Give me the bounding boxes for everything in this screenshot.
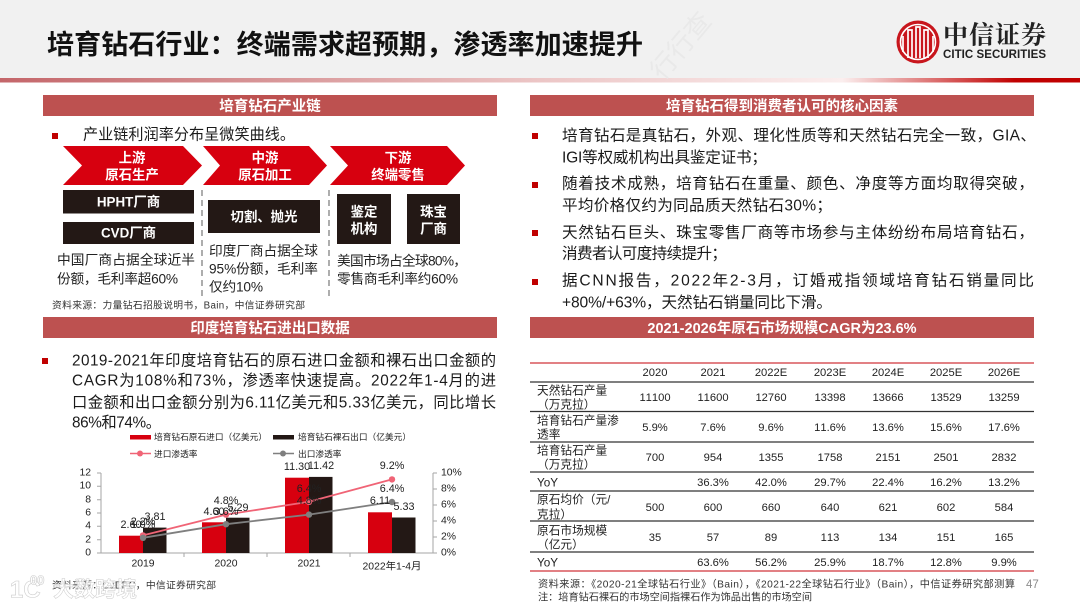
row: penetration: 5.9%: [642, 422, 668, 434]
chart axes: 2020: [214, 558, 238, 570]
source: chain: 资料来源：力量钻石招股说明书，Bain，中信证券研究部: [52, 298, 305, 312]
arrow: midstream: [203, 146, 327, 185]
row: average price: 584: [995, 502, 1013, 514]
watermark: bottom left: [10, 572, 137, 604]
watermark: bottom left: 大数跨境: [53, 578, 137, 602]
text: India share: 印度厂商占据全球: [209, 242, 318, 258]
row: penetration: 培育钻石产量渗: [537, 414, 619, 428]
heading: core factors: 培育钻石得到消费者认可的核心因素: [666, 97, 898, 115]
row: penetration: 7.6%: [700, 422, 726, 434]
table header: 2023E: [814, 367, 846, 379]
arrow: downstream: 下游: [385, 150, 412, 166]
text: US share: 零售商毛利率约60%: [337, 270, 458, 286]
row: market YoY: YoY: [537, 556, 558, 570]
box: jewellery: 珠宝: [420, 204, 447, 220]
chart axes: 12: [79, 468, 91, 478]
bullet: India CAGR: 口金额和出口金额分别为6.11亿美元和5.33亿美元，同比增长: [72, 394, 496, 412]
header band: [0, 0, 1080, 82]
chart axes: 0: [85, 548, 91, 558]
source: India chart: 资料来源：CJEPC，中信证券研究部: [52, 578, 216, 592]
bullet: real diamonds: 培育钻石是真钻石，外观、理化性质等和天然钻石完全一致，GIA、: [562, 126, 1036, 144]
chart axes: 2021: [297, 558, 321, 570]
row: market size: 35: [649, 532, 661, 544]
chart legend: 培育钻石裸石出口（亿美元）: [298, 431, 411, 442]
bullet: CNN report: +80%/+63%，天然钻石销量同比下滑。: [562, 294, 832, 312]
panel: industry chain: [43, 95, 497, 312]
chart legend: 进口渗透率: [154, 448, 198, 459]
panel: consumer recognition: [530, 95, 1036, 312]
chart axes: 4: [85, 520, 91, 532]
data labels: 4.60: [203, 506, 225, 518]
data labels: 11.42: [308, 460, 334, 472]
row: average price: 660: [762, 502, 780, 514]
row: lab-grown output: 954: [704, 452, 722, 464]
data labels: 9.2%: [380, 460, 405, 472]
row: market YoY: 63.6%: [697, 557, 729, 569]
table header: 2026E: [988, 367, 1020, 379]
row: market size: 89: [765, 532, 777, 544]
chart axes: 8%: [441, 484, 456, 494]
arrow: upstream: 上游: [119, 150, 146, 166]
bullet: CNN report: [532, 272, 1034, 312]
bullet: market participants: [532, 224, 1034, 262]
row: natural output: 13398: [814, 392, 846, 404]
table header: 2025E: [930, 367, 962, 379]
table header: 2021: [701, 367, 725, 379]
row: market size: 151: [937, 532, 955, 544]
chart axes: 6: [85, 508, 91, 518]
arrow: midstream: 原石加工: [238, 168, 292, 182]
arrow: upstream: 原石生产: [105, 166, 159, 182]
data labels: 4.8%: [297, 495, 322, 507]
chart axes: 6%: [441, 500, 456, 510]
row: market size: 57: [707, 532, 719, 544]
box: jewellery: [407, 194, 460, 244]
row: market YoY: 9.9%: [991, 557, 1017, 569]
arrow: downstream: 终端零售: [371, 166, 425, 182]
bullet: real diamonds: [532, 126, 1036, 166]
logo: CITIC Securities: 中信证券: [943, 22, 1046, 50]
logo: CITIC Securities: CITIC SECURITIES: [943, 49, 1046, 61]
bullet: India CAGR: 2019-2021年印度培育钻石的原石进口金额和裸石出口金额的: [72, 352, 496, 370]
source: market table: [538, 578, 1015, 604]
row: market YoY: [537, 556, 1017, 570]
row: average price: 克拉）: [537, 508, 572, 522]
text: India share: [209, 242, 318, 294]
chart legend: 培育钻石原石进口（亿美元）: [154, 431, 267, 442]
bullet: India CAGR: 86%和74%。: [72, 414, 161, 432]
row: average price: 500: [646, 502, 664, 514]
data labels: 6.11: [370, 495, 390, 507]
box: CVD: [63, 222, 194, 244]
box: HPHT: HPHT厂商: [97, 194, 160, 210]
row: output YoY: 42.0%: [755, 477, 787, 489]
box: certification: 鉴定: [351, 204, 377, 220]
chart axes: 2019: [131, 558, 155, 570]
watermark: bottom left: 1C: [10, 576, 41, 604]
table header: 2022E: [755, 367, 787, 379]
text: China share: 份额，毛利率超60%: [57, 270, 178, 286]
panel: India import and export: [42, 317, 497, 592]
bullet: technology maturity: [532, 174, 1034, 214]
chart axes: 10%: [441, 468, 462, 478]
chart legend: [130, 431, 411, 459]
chart axes: 4%: [441, 516, 456, 526]
heading: industry chain: 培育钻石产业链: [219, 97, 321, 115]
row: natural output: 12760: [755, 392, 787, 404]
row: average price: 640: [821, 502, 839, 514]
table: market size: [530, 363, 1034, 571]
panel: rough diamond market: [530, 317, 1034, 604]
arrow: downstream: [330, 146, 465, 185]
text: US share: 美国市场占全球80%，: [337, 252, 467, 268]
table header: 2024E: [872, 367, 904, 379]
source: market table: 注：培育钻石裸石的市场空间指裸石作为饰品出售的市场空间: [538, 590, 812, 604]
row: natural output: （万克拉）: [537, 398, 595, 412]
row: penetration: 15.6%: [930, 422, 962, 434]
row: penetration: [537, 414, 1020, 442]
row: natural output: 天然钻石产量: [537, 384, 607, 398]
table header: [643, 367, 1020, 379]
row: market YoY: 56.2%: [755, 557, 787, 569]
bullet: technology maturity: 随着技术成熟，培育钻石在重量、颜色、净度等方面均取得突破，: [562, 174, 1034, 192]
heading: market CAGR: [530, 317, 1034, 338]
row: average price: 600: [704, 502, 722, 514]
row: output YoY: YoY: [537, 476, 558, 490]
bullet: technology maturity: 平均价格仅约为同品质天然钻石30%；: [562, 196, 832, 214]
row: market size: 原石市场规模: [537, 524, 607, 538]
row: lab-grown output: 700: [646, 452, 664, 464]
chart axes: [79, 468, 462, 572]
line: export penetration: [140, 499, 395, 541]
row: average price: 原石均价（元/: [537, 492, 611, 506]
row: market YoY: 12.8%: [930, 557, 962, 569]
text: India share: 95%份额，毛利率: [209, 260, 318, 276]
row: average price: [537, 492, 1013, 522]
box: HPHT: [63, 190, 194, 214]
row: market size: 113: [821, 532, 839, 544]
row: market YoY: 25.9%: [814, 557, 846, 569]
bullet: CNN report: 据CNN报告，2022年2-3月，订婚戒指领域培育钻石销量同比: [562, 272, 1034, 290]
row: market YoY: 18.7%: [872, 557, 904, 569]
data labels: 6.4%: [380, 483, 405, 495]
data labels: 2.60: [120, 519, 142, 531]
title: 培育钻石行业：终端需求超预期，渗透率加速提升: [47, 30, 643, 60]
row: market size: [537, 524, 1013, 552]
source: market table: 资料来源：《2020-21全球钻石行业》（Bain），《2021-22全球钻石行业》（Bain），中信证券研究部测算: [538, 578, 1015, 590]
data labels: [120, 460, 415, 531]
text: China share: [57, 252, 195, 286]
table header: 2020: [643, 367, 667, 379]
box: certification: [337, 194, 391, 244]
data labels: 1.9%: [131, 519, 156, 531]
data labels: 4.8%: [214, 495, 239, 507]
bullet: real diamonds: IGI等权威机构出具鉴定证书；: [562, 148, 767, 166]
bullet: market participants: 消费者认可度持续提升；: [562, 244, 727, 262]
chart axes: 10: [79, 480, 91, 492]
bullet: market participants: 天然钻石巨头、珠宝零售厂商等市场参与主体纷纷布局培育钻石，: [562, 224, 1034, 242]
box: certification: 机构: [351, 220, 377, 236]
row: penetration: 17.6%: [988, 422, 1020, 434]
chart axes: 8: [85, 494, 91, 506]
row: market size: 134: [879, 532, 897, 544]
box: cutting and polishing: [208, 200, 320, 233]
chart axes: 2022年1-4月: [363, 560, 421, 572]
row: lab-grown output: 1758: [818, 452, 842, 464]
chart axes: 2%: [441, 532, 456, 542]
data labels: 2.2%: [131, 516, 156, 528]
row: natural output: 13666: [872, 392, 904, 404]
row: penetration: 11.6%: [814, 422, 846, 434]
row: natural output: 13259: [988, 392, 1020, 404]
arrow: midstream: 中游: [252, 150, 279, 166]
watermark: bottom left: 00: [30, 572, 44, 588]
bars: import: [119, 478, 392, 553]
data labels: 5.29: [227, 502, 249, 514]
text: China share: 中国厂商占据全球近半: [57, 252, 195, 268]
row: output YoY: 22.4%: [872, 477, 904, 489]
box: CVD: CVD厂商: [101, 224, 156, 240]
row: penetration: 13.6%: [872, 422, 904, 434]
heading: India data: [43, 317, 497, 338]
row: lab-grown output: 1355: [759, 452, 783, 464]
text: India share: 仅约10%: [209, 280, 263, 294]
chart axes: 0%: [441, 548, 456, 558]
line: import penetration: [140, 476, 395, 539]
row: output YoY: 16.2%: [930, 477, 962, 489]
box: jewellery: 厂商: [420, 220, 447, 236]
box: cutting and polishing: 切割、抛光: [231, 208, 297, 224]
row: lab-grown output: 2832: [992, 452, 1016, 464]
row: lab-grown output: [537, 444, 1016, 472]
watermark: header: 行行查: [644, 6, 717, 85]
bullet: smile curve: 产业链利润率分布呈微笑曲线。: [83, 126, 295, 144]
row: output YoY: 13.2%: [988, 477, 1020, 489]
row: natural output: 11100: [639, 392, 671, 404]
row: lab-grown output: （万克拉）: [537, 458, 595, 472]
row: average price: 621: [879, 502, 897, 514]
heading: market CAGR: 2021-2026年原石市场规模CAGR为23.6%: [647, 319, 917, 337]
logo: CITIC Securities: [896, 20, 1046, 64]
bars: export: [143, 477, 416, 553]
row: market size: 165: [995, 532, 1013, 544]
data labels: 3.81: [144, 511, 166, 523]
chart: import and export: [79, 431, 462, 572]
row: penetration: 透率: [537, 428, 561, 442]
row: market size: （亿元）: [537, 538, 584, 552]
chart legend: 出口渗透率: [298, 448, 342, 459]
row: average price: 602: [937, 502, 955, 514]
row: lab-grown output: 2501: [934, 452, 958, 464]
heading: industry chain: [43, 95, 497, 116]
row: natural output: 11600: [697, 392, 729, 404]
row: natural output: [537, 384, 1020, 412]
heading: India data: 印度培育钻石进出口数据: [190, 319, 350, 337]
row: output YoY: 36.3%: [697, 477, 729, 489]
data labels: 6.4%: [297, 483, 322, 495]
row: output YoY: 29.7%: [814, 477, 846, 489]
row: lab-grown output: 2151: [876, 452, 900, 464]
arrow: upstream: [63, 146, 202, 185]
chart axes: 2: [85, 534, 91, 546]
page number: 47: [1026, 579, 1039, 591]
row: lab-grown output: 培育钻石产量: [537, 444, 607, 458]
row: output YoY: [537, 476, 1020, 490]
bullet: India CAGR: CAGR为108%和73%，渗透率快速提高。2022年1-4月的进: [72, 372, 496, 390]
heading: core factors: [530, 95, 1034, 116]
text: US share: [337, 252, 467, 286]
bullet: India CAGR: [42, 352, 496, 432]
data labels: 5.33: [393, 501, 415, 513]
row: penetration: 9.6%: [758, 422, 784, 434]
data labels: 3.6%: [214, 506, 239, 518]
data labels: 11.30: [284, 461, 310, 473]
row: natural output: 13529: [930, 392, 962, 404]
